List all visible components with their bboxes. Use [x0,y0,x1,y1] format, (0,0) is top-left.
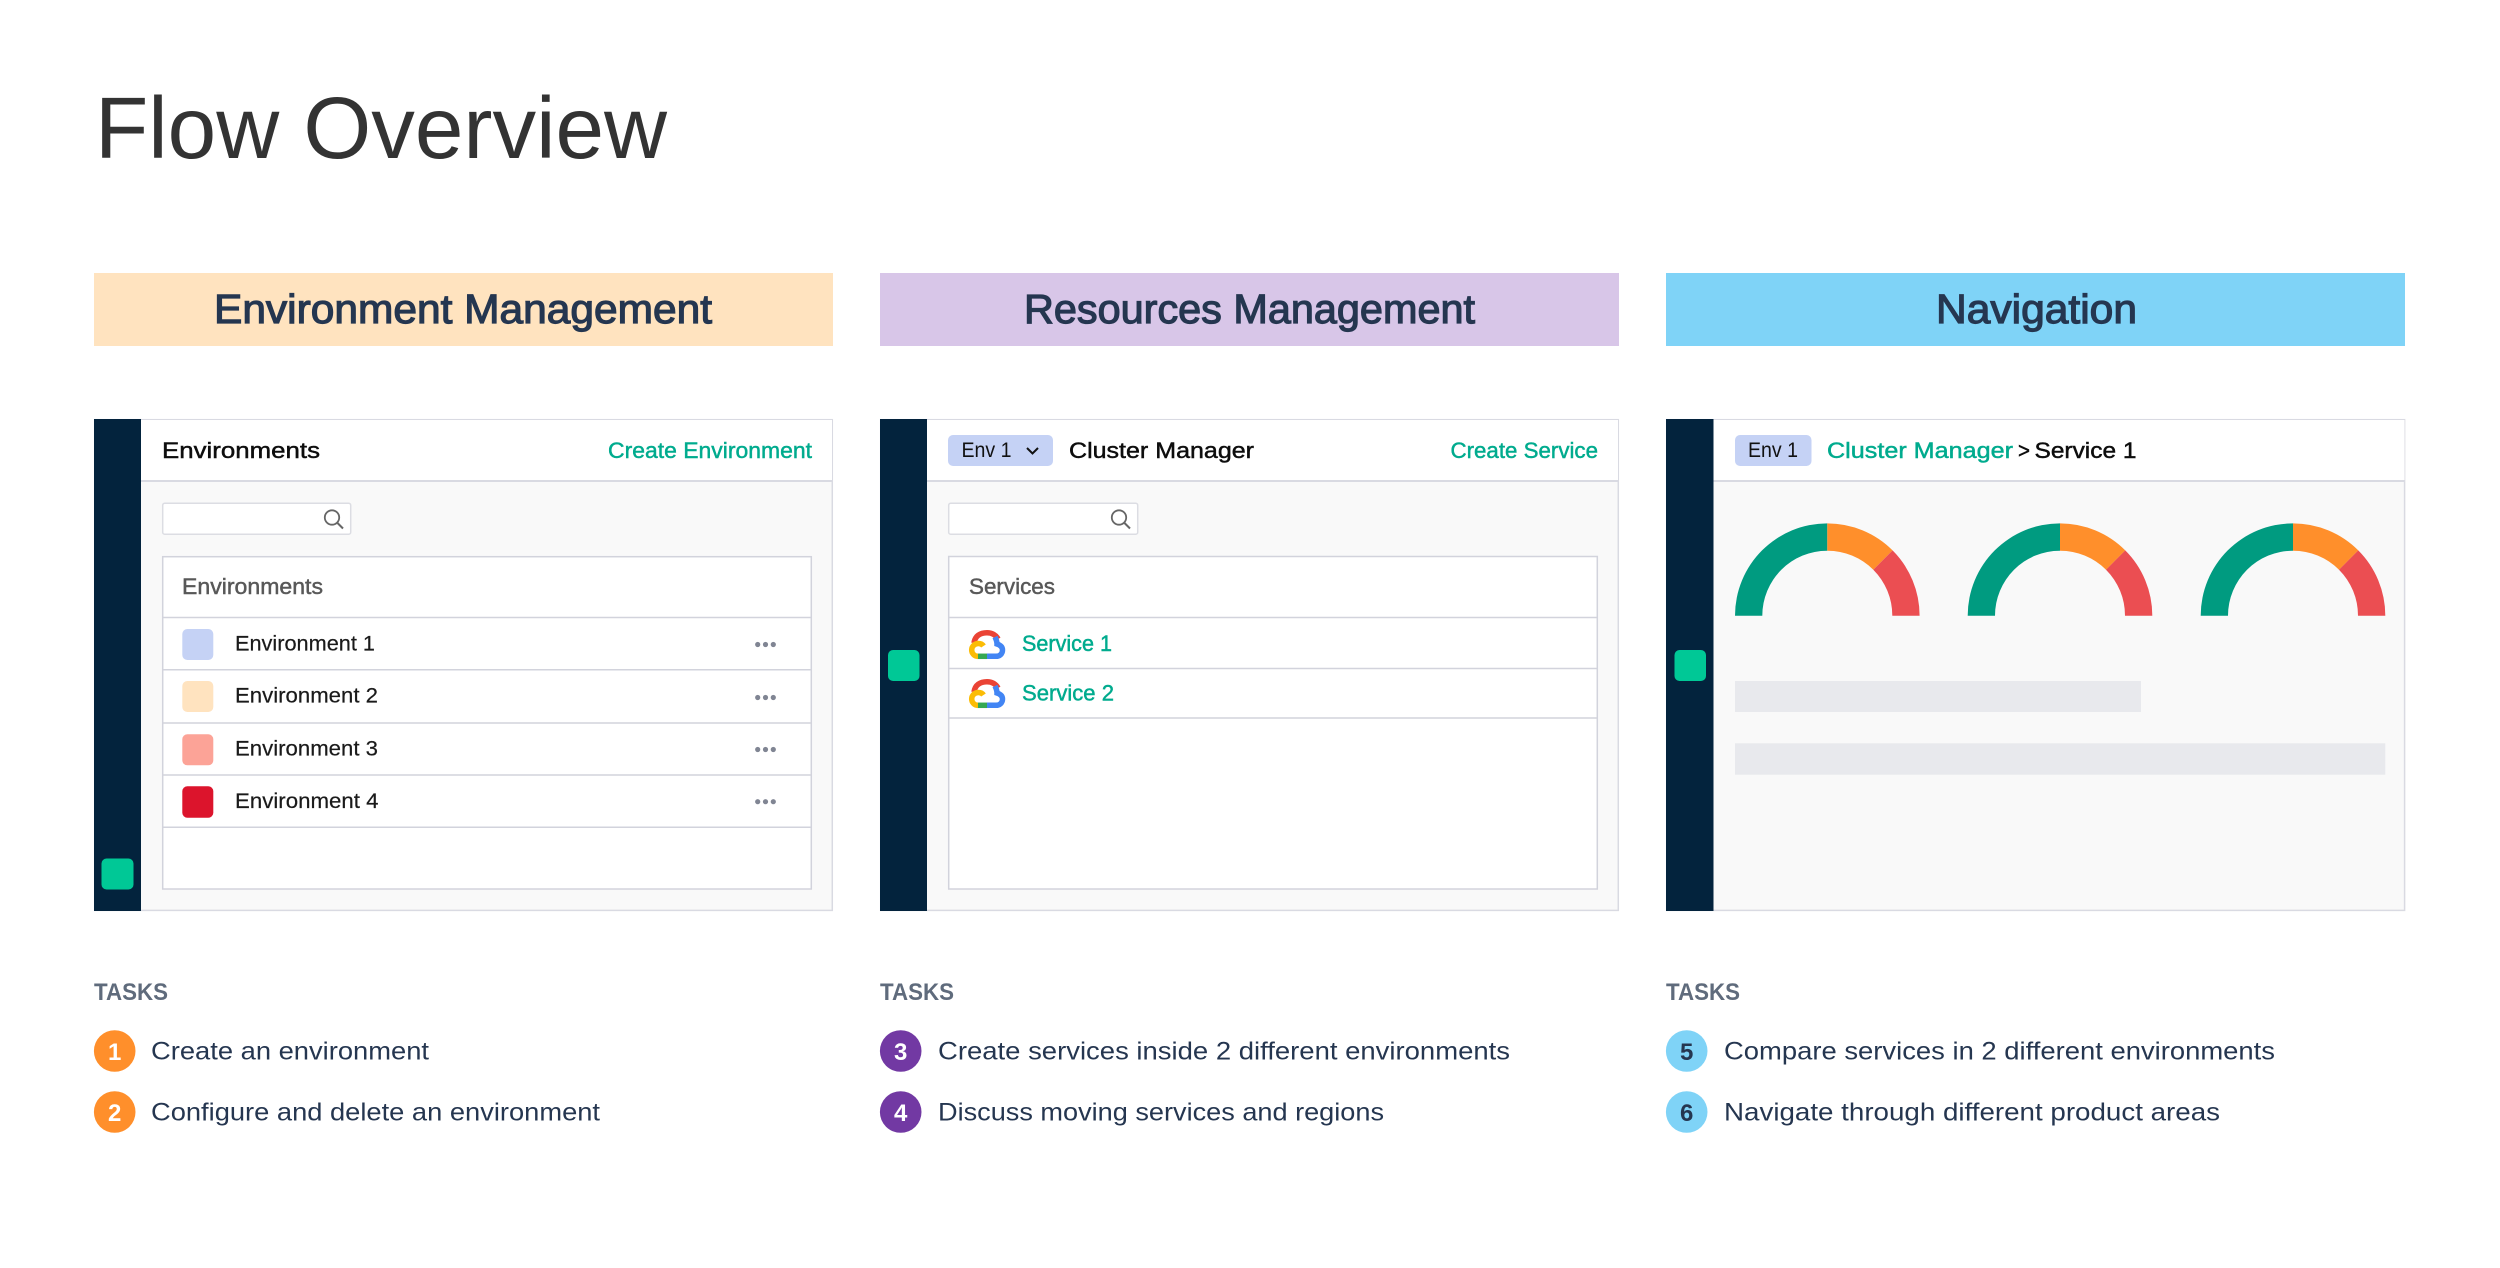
heading: navigation [1666,273,2405,346]
sidebar [1666,419,1714,911]
create service link: Create Service [1450,438,1598,463]
tasks heading: TASKS [1666,979,1740,1006]
task 1: 1 [108,1039,121,1066]
create environment link: Create Environment [608,438,812,463]
breadcrumb [1827,438,2136,463]
sidebar active item [1674,650,1706,681]
task 6 [1666,1091,2220,1133]
row: environment 4: Environment 4 [235,790,379,813]
breadcrumb: > [2018,438,2030,463]
sidebar active item [102,858,134,890]
row: service 1 [972,631,1112,656]
search box [163,503,351,534]
task 4: Discuss moving services and regions [938,1098,1384,1126]
list header: Environments [182,574,323,599]
task 3 [880,1030,1510,1072]
heading: environment management [94,273,833,346]
panel: cluster manager screen [880,419,1618,911]
heading: navigation: Navigation [1936,286,2137,332]
heading: resources management [880,273,1619,346]
list header: Services [969,574,1055,599]
task 4 [880,1091,1384,1133]
row: environment 2: Environment 2 [235,685,378,708]
row: environment 1: Environment 1 [235,633,375,656]
breadcrumb: Cluster Manager [1827,438,2013,463]
row: environment 1 [182,629,776,660]
heading: environment management: Environment Management [214,286,713,332]
services list [949,556,1597,889]
row: environment 3: Environment 3 [235,738,378,761]
placeholder bar long [1735,743,2385,775]
tasks heading: TASKS [94,979,168,1006]
breadcrumb: Service 1 [2034,438,2136,463]
screen title: Cluster Manager [1069,438,1254,463]
task 5 [1666,1030,2275,1072]
screen title: Environments [162,438,320,463]
tasks heading: TASKS [880,979,954,1006]
gauge 3 [2201,523,2385,616]
task 6: Navigate through different product areas [1724,1098,2220,1126]
search box [949,503,1138,534]
environment selector: Env 1 [962,439,1012,462]
task 2 [94,1091,600,1133]
row: environment 4 [182,786,776,818]
task 3: 3 [894,1039,907,1066]
row: environment 2 [182,681,776,712]
environment selector [948,435,1053,466]
panel: service dashboard screen [1666,419,2405,911]
sidebar [94,419,141,911]
gauge 2 [1968,523,2152,616]
row: environment 3 [182,734,776,765]
sidebar active item [888,650,920,681]
environment chip: Env 1 [1748,439,1798,462]
tasks: navigation [1666,979,2275,1133]
row: service 1: Service 1 [1022,631,1112,656]
environment chip [1735,435,1812,466]
gauge 1 [1735,523,1920,616]
task 5: Compare services in 2 different environments [1724,1038,2275,1066]
row: service 2: Service 2 [1022,680,1114,706]
heading: resources management: Resources Management [1024,286,1476,332]
task 2: 2 [108,1100,121,1127]
row: service 2 [972,680,1114,706]
sidebar [880,419,927,911]
task 1: Create an environment [151,1038,429,1066]
task 2: Configure and delete an environment [151,1098,600,1126]
environments list [163,557,811,889]
task 3: Create services inside 2 different environments [938,1038,1510,1066]
tasks: environment management [94,979,600,1133]
tasks: resources management [880,979,1510,1133]
placeholder bar short [1735,681,2141,712]
icon: google cloud [972,682,1002,705]
panel: environments screen [94,419,832,911]
task 4: 4 [894,1100,908,1127]
task 5: 5 [1680,1039,1693,1066]
title: Flow Overview [95,80,668,177]
task 6: 6 [1680,1100,1693,1127]
task 1 [94,1030,429,1072]
icon: google cloud [972,633,1002,656]
